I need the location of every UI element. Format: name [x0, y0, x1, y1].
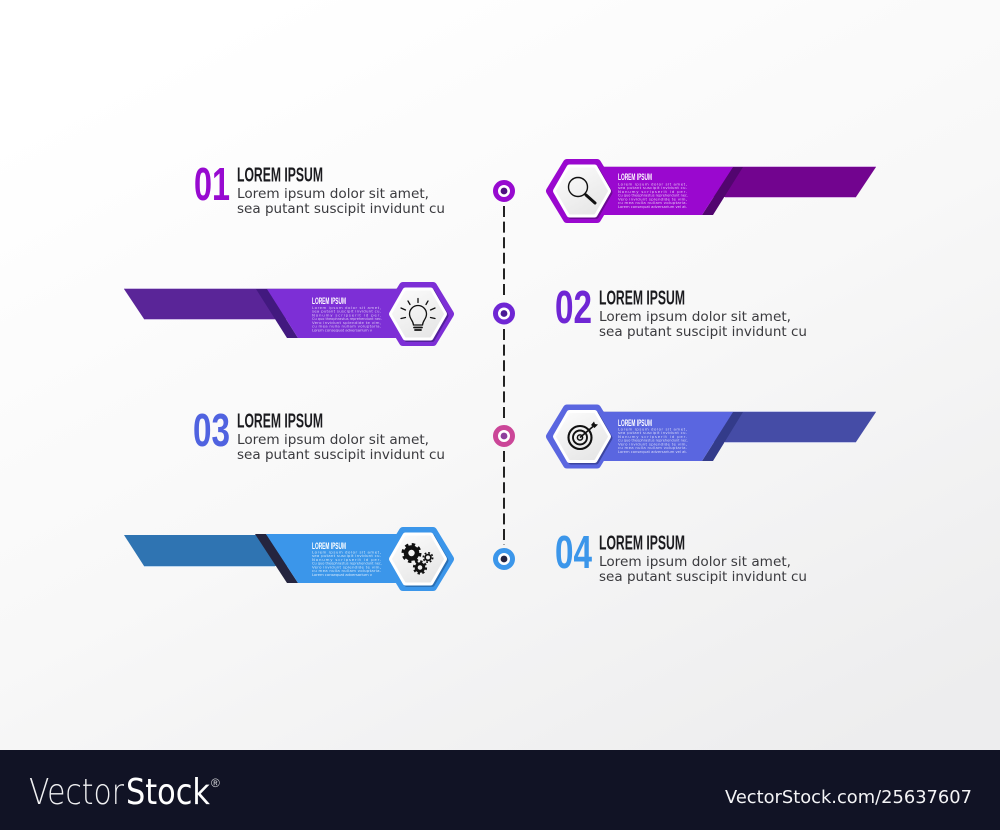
- panel: banner 1 search: [550, 163, 876, 219]
- text block 03: LOREM IPSUM: [237, 410, 323, 432]
- text block 01: LOREM IPSUM: [237, 164, 323, 186]
- banner 2 small text: Vero invidunt splendide te vim,: [312, 320, 381, 325]
- text block 04: sea putant suscipit invidunt cu: [599, 569, 807, 585]
- text block 01: 01: [194, 158, 230, 210]
- banner 4 small text: LOREM IPSUM: [312, 541, 346, 552]
- text block 02: [555, 281, 807, 340]
- text block 03: [193, 404, 445, 463]
- text block 04: [555, 526, 807, 585]
- footer logo: [29, 772, 210, 813]
- banner 4 small text: Lorem consequat adversarium v: [312, 572, 373, 577]
- text block 02: Lorem ipsum dolor sit amet,: [599, 309, 791, 325]
- banner 4 small text: Vero invidunt splendide te vim,: [312, 564, 381, 569]
- text block 03: 03: [193, 404, 230, 456]
- banner 2 small text: cu mea nulla nullam voluptaria.: [312, 324, 381, 329]
- text block 02: sea putant suscipit invidunt cu: [599, 324, 807, 340]
- banner 3 small text: Cu quo theophrastus reprehendunt nec.: [618, 438, 688, 443]
- icon: gears: [403, 544, 433, 574]
- banner 3 small text: cu mea nulla nullam voluptaria.: [618, 445, 687, 450]
- text block 02: 02: [555, 281, 592, 333]
- timeline marker 1: [496, 182, 512, 200]
- text block 04: LOREM IPSUM: [599, 532, 685, 554]
- icon: light bulb: [401, 298, 435, 330]
- footer logo: Stock: [126, 772, 210, 813]
- banner 2 small text: Lorem consequat adversarium v: [312, 327, 373, 332]
- icon: target with arrow: [568, 422, 598, 449]
- banner 1 small text: sea putant suscipit invidunt cu.: [618, 185, 687, 190]
- text block 04: 04: [555, 526, 592, 578]
- banner 3 small text: LOREM IPSUM: [618, 418, 652, 429]
- banner 3 small text: Lorem consequat adversarium vel at.: [618, 449, 687, 454]
- banner 2 small text: Nonumy scripserit id per.: [312, 312, 381, 318]
- banner 1 small text: LOREM IPSUM: [618, 172, 652, 183]
- banner 2 small text: Cu quo theophrastus reprehendunt nec.: [312, 316, 382, 321]
- icon: magnifier: [568, 178, 595, 203]
- footer image id: VectorStock.com/25637607: [725, 787, 972, 808]
- banner 4 small text: cu mea nulla nullam voluptaria.: [312, 568, 381, 573]
- text block 04: Lorem ipsum dolor sit amet,: [599, 554, 791, 570]
- banner 1 small text: Lorem ipsum dolor sit amet,: [618, 182, 687, 186]
- text block 01: [194, 158, 445, 217]
- timeline marker 2: [496, 305, 512, 322]
- footer registered mark: ®: [211, 776, 220, 790]
- timeline marker 3: [496, 428, 512, 444]
- banner 4 small text: Cu quo theophrastus reprehendunt nec.: [312, 561, 382, 566]
- text block 01: sea putant suscipit invidunt cu: [237, 201, 445, 217]
- timeline marker 4: [496, 550, 512, 568]
- panel: banner 3 target: [550, 408, 876, 464]
- banner 4 small text: [312, 541, 382, 577]
- banner 3 small text: Lorem ipsum dolor sit amet,: [618, 426, 687, 432]
- banner 1 small text: [618, 172, 688, 209]
- banner 1 small text: Cu quo theophrastus reprehendunt nec.: [618, 193, 688, 198]
- banner 1 small text: Nonumy scripserit id per.: [618, 189, 687, 194]
- banner 4 small text: sea putant suscipit invidunt cu.: [312, 553, 381, 558]
- banner 2 small text: Lorem ipsum dolor sit amet,: [312, 305, 381, 310]
- panel: banner 4 settings: [124, 531, 450, 587]
- banner 2 small text: [312, 296, 382, 332]
- banner 1 small text: Lorem consequat adversarium vel at.: [618, 204, 687, 209]
- banner 3 small text: [618, 418, 688, 454]
- panel: banner 2 idea: [124, 286, 450, 342]
- banner 4 small text: Nonumy scripserit id per.: [312, 557, 381, 562]
- banner 3 small text: sea putant suscipit invidunt cu.: [618, 430, 687, 435]
- banner 1 small text: Vero invidunt splendide te vim,: [618, 196, 687, 201]
- text block 01: Lorem ipsum dolor sit amet,: [237, 186, 429, 202]
- banner 3 small text: Nonumy scripserit id per.: [618, 434, 687, 439]
- text block 02: LOREM IPSUM: [599, 288, 685, 310]
- text block 03: Lorem ipsum dolor sit amet,: [237, 432, 429, 448]
- footer bar: [0, 750, 1000, 830]
- banner 2 small text: LOREM IPSUM: [312, 296, 346, 307]
- banner 2 small text: sea putant suscipit invidunt cu.: [312, 309, 381, 314]
- text block 03: sea putant suscipit invidunt cu: [237, 447, 445, 463]
- banner 3 small text: Vero invidunt splendide te vim,: [618, 441, 687, 446]
- timeline dashed line: [503, 206, 505, 545]
- banner 1 small text: cu mea nulla nullam voluptaria.: [618, 200, 687, 205]
- banner 4 small text: Lorem ipsum dolor sit amet,: [312, 550, 381, 554]
- footer logo: Vector: [29, 772, 124, 813]
